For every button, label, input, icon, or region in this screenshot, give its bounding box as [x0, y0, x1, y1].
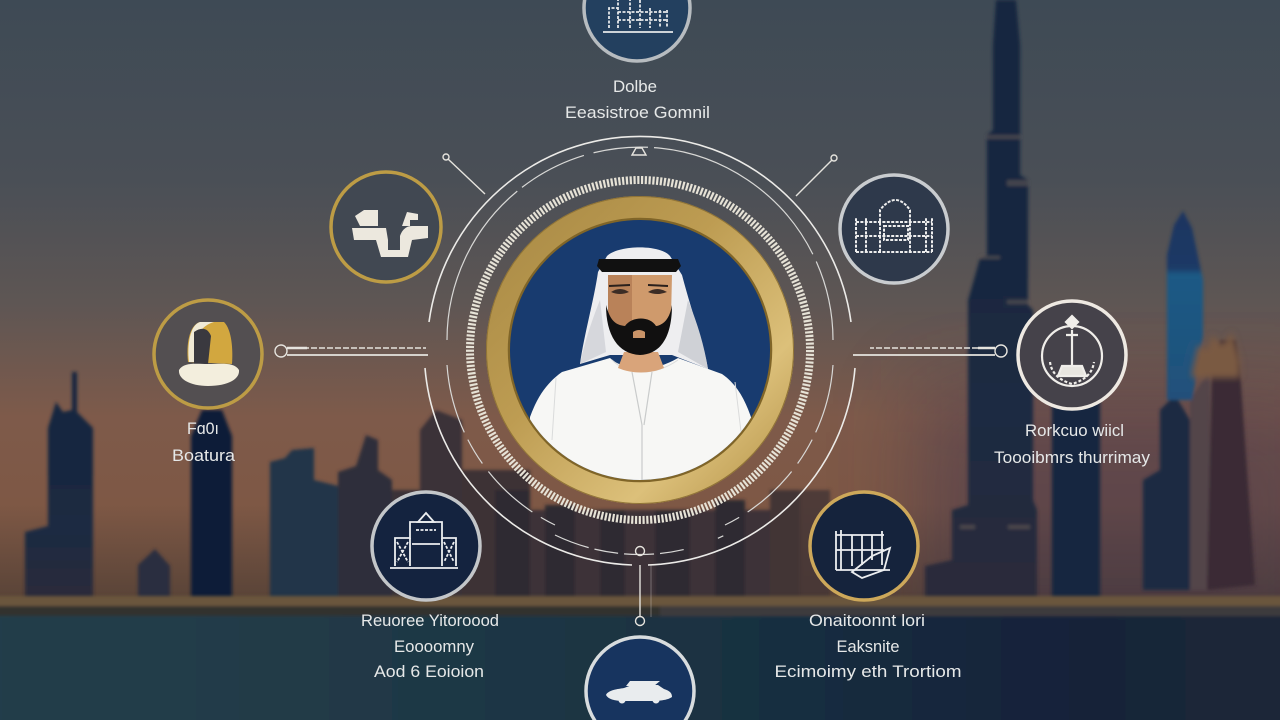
small ring glyph: [632, 148, 646, 155]
icon: mosque: [856, 200, 932, 252]
node: lower left: [372, 492, 480, 600]
label: right: [994, 421, 1150, 467]
icon: scaffolding: [836, 530, 890, 578]
beard: [606, 305, 672, 355]
icon: headscarf figure: [179, 322, 239, 386]
node: upper right: [840, 175, 948, 283]
connector: top right: [796, 155, 837, 196]
node: top: [584, 0, 690, 61]
eyes: [611, 289, 667, 294]
label: right: Toooibmrs thurrimay: [994, 448, 1150, 467]
icon: palace: [603, 0, 673, 32]
center medallion rings: [425, 136, 855, 565]
robe: [530, 358, 752, 490]
node: lower right: [810, 492, 918, 600]
portrait backdrop: [509, 219, 771, 481]
node: left: [154, 300, 262, 408]
connector lines: [275, 148, 1007, 626]
label: right: Rorkcuo wiicl: [1025, 421, 1124, 440]
label: lower right: [774, 611, 962, 681]
icon: car: [606, 681, 672, 704]
label: left: Boatura: [172, 446, 236, 465]
connector: left: [275, 345, 428, 357]
connector: top left: [443, 154, 485, 194]
node: right: [1018, 301, 1126, 409]
face: [632, 275, 672, 326]
label: top: Eeasistroe Gomnil: [565, 103, 710, 122]
label: left: [172, 419, 236, 465]
label: left: Fɑ0ı: [187, 419, 219, 438]
label: lower left: Reuoree Yitoroood: [361, 611, 499, 630]
gold ring: [498, 208, 782, 492]
outer thin ring: [425, 136, 855, 565]
agal headband: [597, 259, 681, 272]
label: top: Dolbe: [613, 77, 657, 96]
connector: right: [853, 345, 1007, 357]
label: top: [565, 77, 710, 122]
node: bottom: [586, 637, 694, 720]
icon: waterfront: [352, 210, 428, 257]
icon: gateway: [390, 513, 458, 568]
label: lower left: [361, 611, 499, 681]
label: lower right: Eaksnite: [836, 637, 900, 656]
dotted ring: [470, 180, 810, 520]
icon: emblem: [1042, 316, 1102, 386]
middle dashed ring: [447, 147, 833, 555]
node: upper left: [331, 172, 441, 282]
connector: bottom: [636, 546, 651, 626]
label: lower right: Onaitoonnt lori: [809, 611, 925, 630]
headscarf: [580, 247, 708, 369]
label: lower right: Ecimoimy eth Trortiom: [774, 662, 962, 681]
background: shoreline and water: [0, 596, 1280, 720]
central portrait: [509, 219, 771, 490]
label: lower left: Aod 6 Eoioion: [374, 662, 484, 681]
label: lower left: Eoooomny: [394, 637, 474, 656]
